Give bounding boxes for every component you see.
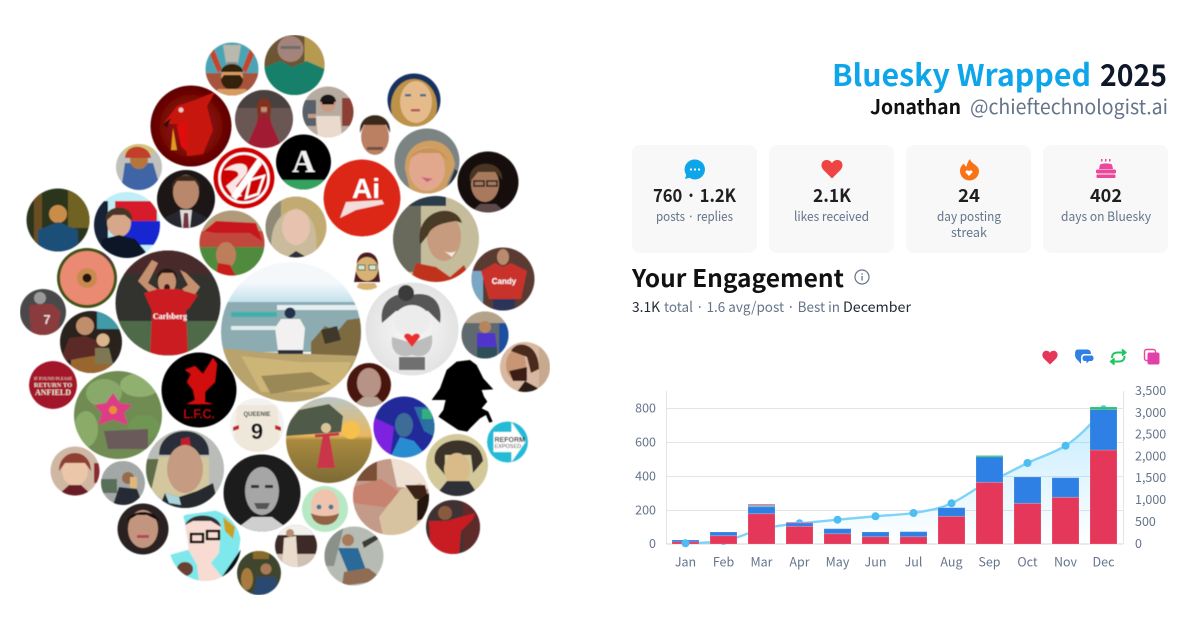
avatar: cartoon with trophy <box>205 42 259 97</box>
avatar: purple neon <box>373 396 435 458</box>
left axis labels: 0 <box>649 533 656 552</box>
bar: October <box>1014 477 1041 544</box>
avatar: Return to Anfield: ANFIELD <box>35 388 71 397</box>
avatar: shirt number 9: QUEENIE <box>243 412 271 418</box>
avatar: player number 7 <box>20 289 66 335</box>
panel: day posting streak: day posting <box>937 206 1002 225</box>
avatar: woman in red dress <box>235 90 293 148</box>
right axis labels: 0 <box>1135 533 1142 552</box>
avatar: Return to Anfield <box>29 361 77 427</box>
avatar: man in suit <box>157 170 215 228</box>
month labels <box>675 552 1115 570</box>
avatar: dark haired woman <box>117 503 169 555</box>
bar: November <box>1052 478 1079 544</box>
bar: January <box>672 540 699 544</box>
avatar: woman with red scarf <box>199 210 265 276</box>
avatar: man in Candy shirt: Candy <box>492 277 517 286</box>
panel: likes received <box>769 145 894 253</box>
chart: monthly engagement <box>635 380 1166 570</box>
avatar: man with dog <box>237 551 281 595</box>
avatar: bald man on maroon <box>347 363 391 407</box>
avatar: orange gerbera flower <box>57 248 117 308</box>
avatar cluster <box>20 35 550 595</box>
avatar: father and child <box>60 311 122 373</box>
area under cumulative line <box>686 409 1104 544</box>
left axis labels: 600 <box>635 432 656 450</box>
bar: June <box>862 532 889 544</box>
panel: posts and replies: posts · replies <box>656 206 733 225</box>
right axis labels: 2,000 <box>1135 446 1166 464</box>
avatar: blonde woman on navy <box>387 73 441 133</box>
panel: likes received: likes received <box>794 206 869 225</box>
avatar: young man in red shirt <box>393 196 479 282</box>
bar: August <box>938 508 965 544</box>
right axis labels: 3,000 <box>1135 402 1166 421</box>
user name and handle <box>870 91 1168 120</box>
avatar: man with pint <box>101 461 145 505</box>
avatar: shirt number 9 <box>230 398 284 452</box>
avatar: Reform Exposed arrow: EXPOSED <box>494 444 521 450</box>
avatar: Return to Anfield: IF FOUND PLEASE <box>34 376 72 381</box>
panel: posts and replies: 760 · 1.2K <box>653 182 737 208</box>
bar: March <box>748 504 775 544</box>
avatar: man cutout <box>359 114 391 156</box>
avatar: black A logo: A <box>292 143 315 179</box>
avatar: beach with seated figure <box>221 262 361 402</box>
month labels: Sep <box>978 552 1001 570</box>
avatar: woman in beanie <box>146 430 224 508</box>
month labels: Feb <box>713 552 734 570</box>
engagement summary: 3.1K <box>632 297 660 317</box>
right axis labels: 1,500 <box>1135 467 1166 486</box>
left axis labels: 800 <box>635 398 656 416</box>
avatar: red Ai logo: Ai <box>352 173 380 204</box>
avatar: person in patterned suit <box>275 525 317 567</box>
panel: likes received: 2.1K <box>813 182 852 208</box>
avatar: child with red hair <box>50 446 100 496</box>
panel: days on Bluesky: days on Bluesky <box>1061 206 1151 225</box>
panel: day posting streak: streak <box>951 222 988 241</box>
stacked bars <box>672 407 1117 544</box>
avatar: blonde woman smiling <box>265 196 327 258</box>
panel: posts and replies <box>632 145 757 253</box>
avatar: black A logo <box>276 134 332 190</box>
avatar: Reform Exposed arrow: REFORM <box>494 437 525 444</box>
avatar: illustrated soldier <box>26 188 90 252</box>
first data point <box>682 539 690 547</box>
month labels: Jul <box>905 552 922 570</box>
avatar: Return to Anfield: RETURN TO <box>34 382 72 389</box>
icon: speech bubble <box>685 159 705 179</box>
avatar: man in green shirt <box>264 35 324 95</box>
avatar: curly haired man <box>426 434 488 496</box>
cumulative points <box>720 405 1108 545</box>
avatar: man in blue shirt <box>461 311 509 359</box>
month labels: Apr <box>789 552 810 570</box>
bar: April <box>786 522 813 544</box>
avatar: woman with strawberry blonde hair <box>394 128 460 194</box>
avatar: bearded man profile <box>500 342 550 392</box>
avatar: Sherlock silhouette <box>432 360 493 432</box>
month labels: Jan <box>675 552 696 570</box>
panel: days on Bluesky: 402 <box>1090 182 1122 208</box>
avatar: glasses cartoon <box>169 509 241 581</box>
right axis labels: 3,500 <box>1135 380 1166 399</box>
user name and handle: Jonathan <box>870 91 961 120</box>
icon: legend heart <box>1042 351 1058 364</box>
bar: February <box>710 532 737 544</box>
avatar: woman with sunglasses <box>302 86 354 138</box>
panel: day posting streak: 24 <box>958 182 980 208</box>
icon: cake <box>1096 159 1116 178</box>
title: Bluesky Wrapped <box>832 51 1091 95</box>
avatar: water lily <box>74 371 162 459</box>
avatar: Salah in red kit <box>426 500 480 554</box>
left axis labels: 400 <box>635 466 656 484</box>
left axis labels: 200 <box>635 500 656 518</box>
right axis labels: 1,000 <box>1135 489 1166 508</box>
bar: December <box>1090 407 1117 544</box>
avatar: man shouting in red kit <box>115 250 221 356</box>
avatar: memoji bald man <box>302 486 348 532</box>
heading: your engagement: Your Engagement <box>631 259 844 294</box>
avatar: red white logo <box>214 148 274 208</box>
user name and handle: @chieftechnologist.ai <box>970 91 1168 120</box>
avatar: woman in red dress at sunset <box>286 397 372 483</box>
month labels: Nov <box>1054 552 1078 570</box>
icon: legend replies <box>1075 350 1094 364</box>
icon: flame <box>960 159 979 180</box>
avatar: sketch girl with red heart <box>365 282 459 376</box>
icon: legend reposts <box>1111 350 1126 364</box>
panel: day posting streak <box>906 145 1031 253</box>
chart legend <box>1042 350 1160 364</box>
right axis labels: 2,500 <box>1135 424 1166 442</box>
engagement summary: total · 1.6 avg/post · Best in <box>664 297 840 317</box>
cumulative line <box>686 409 1104 543</box>
avatar: man with dark glasses <box>457 151 519 213</box>
avatar: man shouting in red kit: Carlsberg <box>153 312 187 321</box>
title: 2025 <box>1100 51 1167 95</box>
avatar: LFC liverbird on black: L.F.C. <box>183 407 215 421</box>
month labels: Mar <box>750 552 773 570</box>
avatar: bitmoji girl <box>354 252 380 290</box>
avatar: woman in blue top <box>324 526 384 586</box>
icon: heart <box>821 160 843 178</box>
icon: legend quotes <box>1144 350 1160 364</box>
avatar: LFC liverbird on black <box>161 352 237 428</box>
icon: info <box>855 270 869 284</box>
engagement summary: December <box>843 297 912 317</box>
avatar: Reform Exposed arrow <box>487 422 528 462</box>
bar: May <box>824 529 851 544</box>
avatar: red phoenix <box>150 85 232 167</box>
bar: September <box>976 456 1003 544</box>
avatar: red Ai logo <box>324 160 400 236</box>
right axis labels <box>1135 380 1166 552</box>
avatar: black and white portrait <box>223 454 301 532</box>
panel: days on Bluesky <box>1043 145 1168 253</box>
avatar: sleeping dog and man <box>353 459 429 535</box>
bar: July <box>900 532 927 544</box>
month labels: May <box>826 552 850 570</box>
month labels: Jun <box>865 552 886 570</box>
engagement summary <box>632 297 912 317</box>
avatar: shirt number 9: 9 <box>251 419 263 444</box>
right axis labels: 500 <box>1135 511 1156 530</box>
month labels: Aug <box>940 552 963 570</box>
avatar: TV pundit <box>94 192 161 258</box>
avatar: Paddington <box>116 144 162 190</box>
month labels: Dec <box>1093 552 1115 570</box>
avatar: player number 7: 7 <box>43 312 51 327</box>
left axis labels <box>635 398 656 552</box>
avatar: man in Candy shirt <box>471 247 535 311</box>
month labels: Oct <box>1017 552 1038 570</box>
